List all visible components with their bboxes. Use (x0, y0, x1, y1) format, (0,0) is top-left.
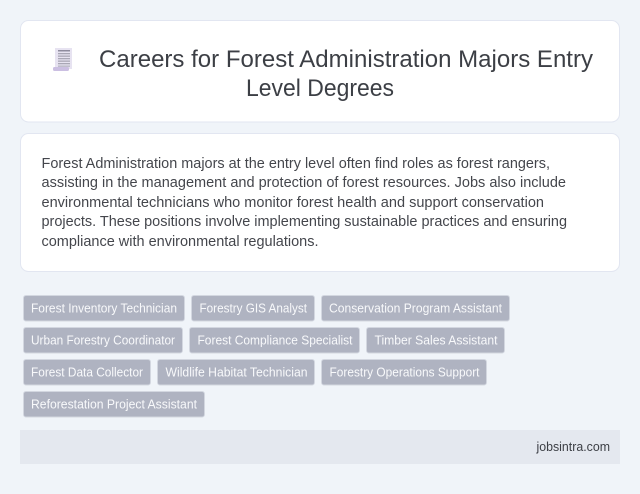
footer text: site name: jobsintra.com (536, 439, 610, 454)
text block: description: compliance with environmental regulations. (42, 233, 318, 250)
tag: Forest Inventory Technician: Forest Inventory Technician (31, 300, 177, 316)
icon: document scroll (53, 48, 72, 71)
footer bar (20, 430, 620, 464)
tag: Forest Data Collector (24, 360, 150, 385)
text block: description: assisting in the management and protection of forest resources. Jobs also include (42, 174, 566, 191)
tag: Reforestation Project Assistant: Reforestation Project Assistant (31, 396, 197, 412)
text block: description: environmental technicians who monitor forest health and support conservation (42, 194, 544, 211)
tag: Wildlife Habitat Technician: Wildlife Habitat Technician (166, 364, 308, 380)
tag: Reforestation Project Assistant (24, 392, 204, 417)
tag: Forestry GIS Analyst: Forestry GIS Analyst (200, 300, 307, 316)
tag group: job titles (24, 296, 510, 417)
tag: Forest Data Collector: Forest Data Collector (31, 364, 144, 380)
title: Careers for Forest Administration Majors Entry (99, 46, 594, 73)
tag: Forestry Operations Support (322, 360, 486, 385)
panel: description card (20, 134, 620, 272)
tag: Forestry Operations Support: Forestry Operations Support (330, 364, 480, 380)
tag: Wildlife Habitat Technician (158, 360, 314, 385)
tag: Forest Compliance Specialist (190, 328, 360, 353)
text block: description: projects. These positions involve implementing sustainable practices and ensuring (42, 213, 567, 230)
tag: Conservation Program Assistant: Conservation Program Assistant (329, 300, 502, 316)
panel: title card (20, 20, 620, 122)
title (99, 46, 594, 102)
text block: description (42, 155, 567, 250)
tag: Timber Sales Assistant (366, 328, 504, 353)
tag: Forestry GIS Analyst (192, 296, 314, 321)
tag: Forest Inventory Technician (24, 296, 184, 321)
tag: Urban Forestry Coordinator (24, 328, 182, 353)
tag: Timber Sales Assistant: Timber Sales Assistant (374, 332, 498, 348)
tag: Urban Forestry Coordinator: Urban Forestry Coordinator (31, 332, 176, 348)
text block: description: Forest Administration majors at the entry level often find roles as forest rangers, (42, 155, 550, 172)
tag: Forest Compliance Specialist: Forest Compliance Specialist (198, 332, 353, 348)
title: Level Degrees (246, 75, 394, 102)
tag: Conservation Program Assistant (322, 296, 510, 321)
